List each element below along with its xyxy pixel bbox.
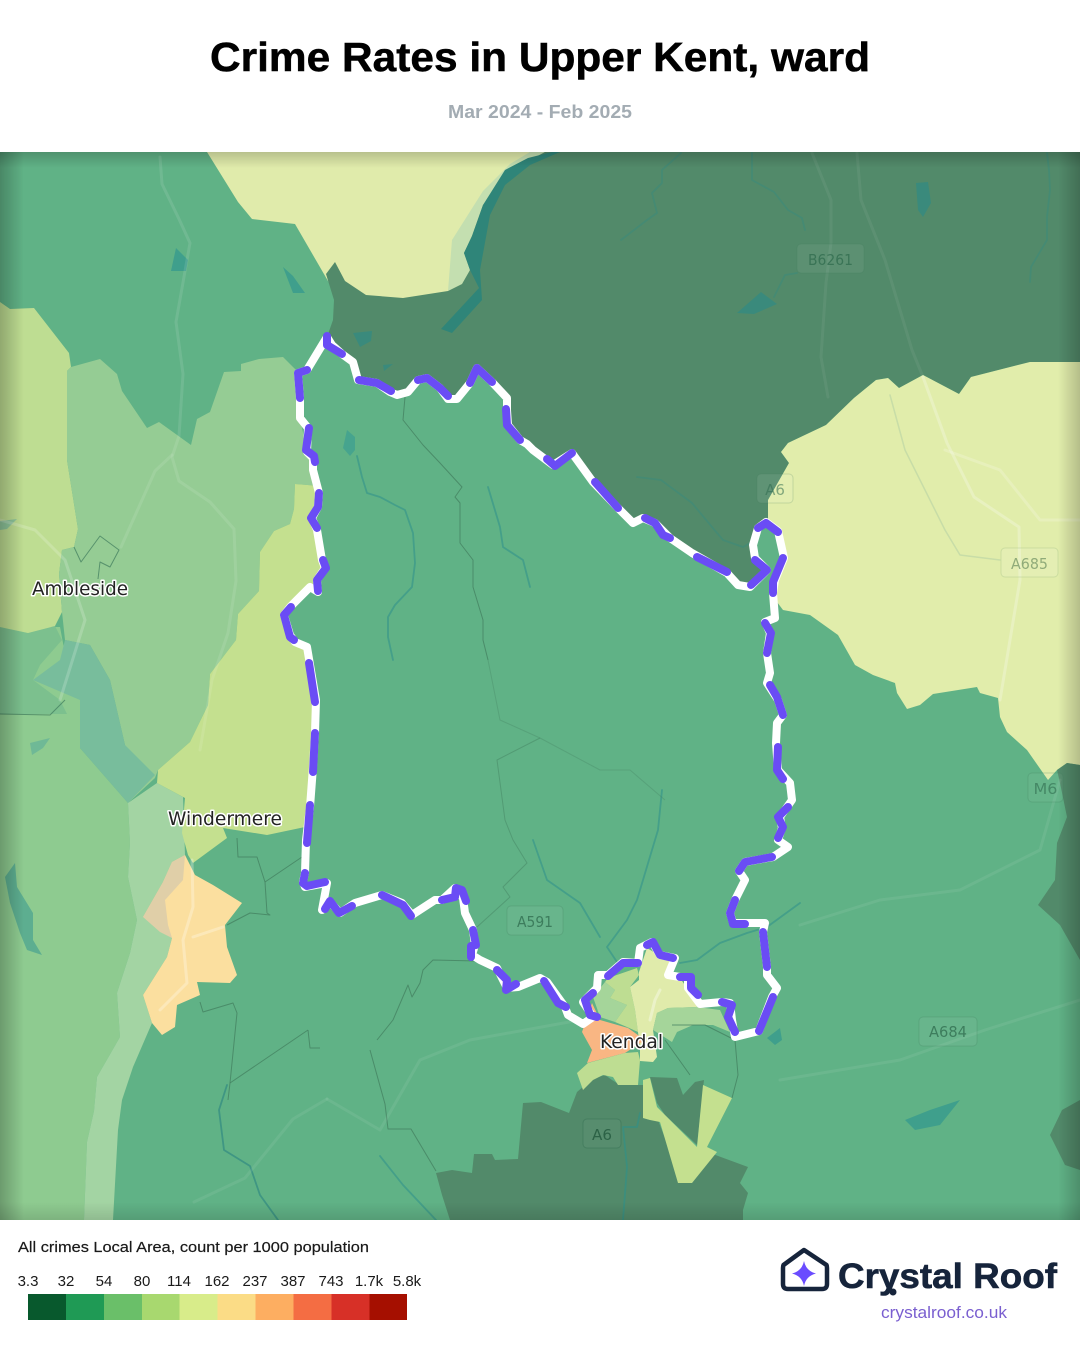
legend scale labels: 743 bbox=[318, 1273, 344, 1290]
region: pale band by the lake bbox=[448, 152, 545, 291]
region: far west lime bbox=[0, 302, 78, 633]
road shield: A684: A684 bbox=[929, 1023, 967, 1041]
legend scale labels: 1.7k bbox=[355, 1273, 384, 1290]
road shield: A685: A685 bbox=[1011, 555, 1048, 573]
place label: Kendal: Kendal bbox=[600, 1031, 663, 1053]
road shield: M6: M6 bbox=[1034, 780, 1058, 798]
ward boundary lines bbox=[0, 397, 738, 1171]
legend scale labels: 162 bbox=[204, 1273, 230, 1290]
road shield: A591: A591 bbox=[517, 913, 553, 931]
region: Kendal west light green bbox=[593, 982, 627, 1022]
road shield: A6 south bbox=[583, 1119, 621, 1148]
road shield: A591 bbox=[507, 906, 563, 935]
website url: crystalroof.co.uk bbox=[881, 1304, 1008, 1322]
rivers bbox=[219, 153, 1050, 1220]
legend scale labels: 5.8k bbox=[393, 1273, 422, 1290]
road shield: A6 north: A6 bbox=[765, 481, 785, 499]
place label: Windermere: Windermere bbox=[168, 808, 282, 830]
legend scale labels: 32 bbox=[58, 1273, 74, 1290]
road shield: B6261: B6261 bbox=[808, 251, 853, 269]
region: west middle green bbox=[0, 626, 67, 714]
region: south dark east piece bbox=[650, 1077, 704, 1145]
region: dark east edge bbox=[1038, 763, 1080, 960]
region: Kendal east light green bbox=[653, 1007, 730, 1042]
region: pale strip south of Windermere bbox=[84, 783, 185, 1220]
region: dark south-east edge bbox=[1050, 1100, 1080, 1170]
legend scale labels: 114 bbox=[167, 1273, 191, 1290]
region: south-west light green bbox=[0, 627, 137, 1220]
region: grey patch of Windermere bbox=[143, 855, 185, 938]
legend colour bar bbox=[28, 1294, 407, 1320]
legend scale labels: 80 bbox=[134, 1273, 150, 1290]
legend scale labels: 387 bbox=[280, 1273, 306, 1290]
legend scale labels: 3.3 bbox=[18, 1273, 38, 1290]
road shield: A6 south: A6 bbox=[592, 1126, 612, 1144]
legend scale labels: 237 bbox=[242, 1273, 268, 1290]
region: teal water band bbox=[441, 152, 560, 333]
legend scale labels: 54 bbox=[96, 1273, 112, 1290]
lakes and tarns bbox=[0, 182, 960, 1130]
region: south lime corridor bbox=[643, 1078, 732, 1183]
road shield: B6261 bbox=[797, 244, 864, 273]
road shield: M6 bbox=[1028, 773, 1063, 802]
region: north-east yellow area bbox=[768, 362, 1080, 780]
subtitle: date range: Mar 2024 - Feb 2025 bbox=[448, 102, 632, 122]
roads bbox=[0, 153, 1080, 1202]
region: Windermere town (high crime) bbox=[143, 855, 242, 1035]
region: Kendal centre yellow bbox=[630, 948, 697, 1062]
region: Kendal south lime bbox=[577, 1052, 640, 1090]
place label: Ambleside: Ambleside bbox=[32, 578, 128, 600]
ward outline: white base line bbox=[284, 337, 792, 1037]
choropleth map bbox=[0, 152, 1080, 1220]
road shield: A684 bbox=[919, 1017, 977, 1046]
region: central west light green bbox=[59, 357, 320, 803]
ward outline: purple dashes bbox=[284, 336, 788, 1032]
logo: house icon with star bbox=[783, 1250, 827, 1289]
edge shading bbox=[0, 152, 1080, 1220]
region: south dark area bbox=[436, 1075, 748, 1220]
region: Windermere lake area bbox=[33, 640, 155, 803]
region: Kendal town centre orange bbox=[582, 1003, 645, 1063]
region: northern yellow area bbox=[207, 152, 530, 300]
title: Crime Rates in Upper Kent, ward bbox=[210, 34, 870, 80]
road shield: A685 bbox=[1001, 548, 1058, 577]
region: dark north-east low-crime area bbox=[326, 152, 1080, 587]
legend title: All crimes Local Area, count per 1000 population bbox=[18, 1239, 369, 1256]
region: Windermere lime bbox=[157, 484, 325, 863]
region: Kendal north lime bbox=[605, 968, 639, 1032]
legend scale labels bbox=[18, 1273, 422, 1290]
logo wordmark: Crystal Roof bbox=[838, 1257, 1057, 1296]
road shield: A6 north bbox=[757, 474, 793, 503]
